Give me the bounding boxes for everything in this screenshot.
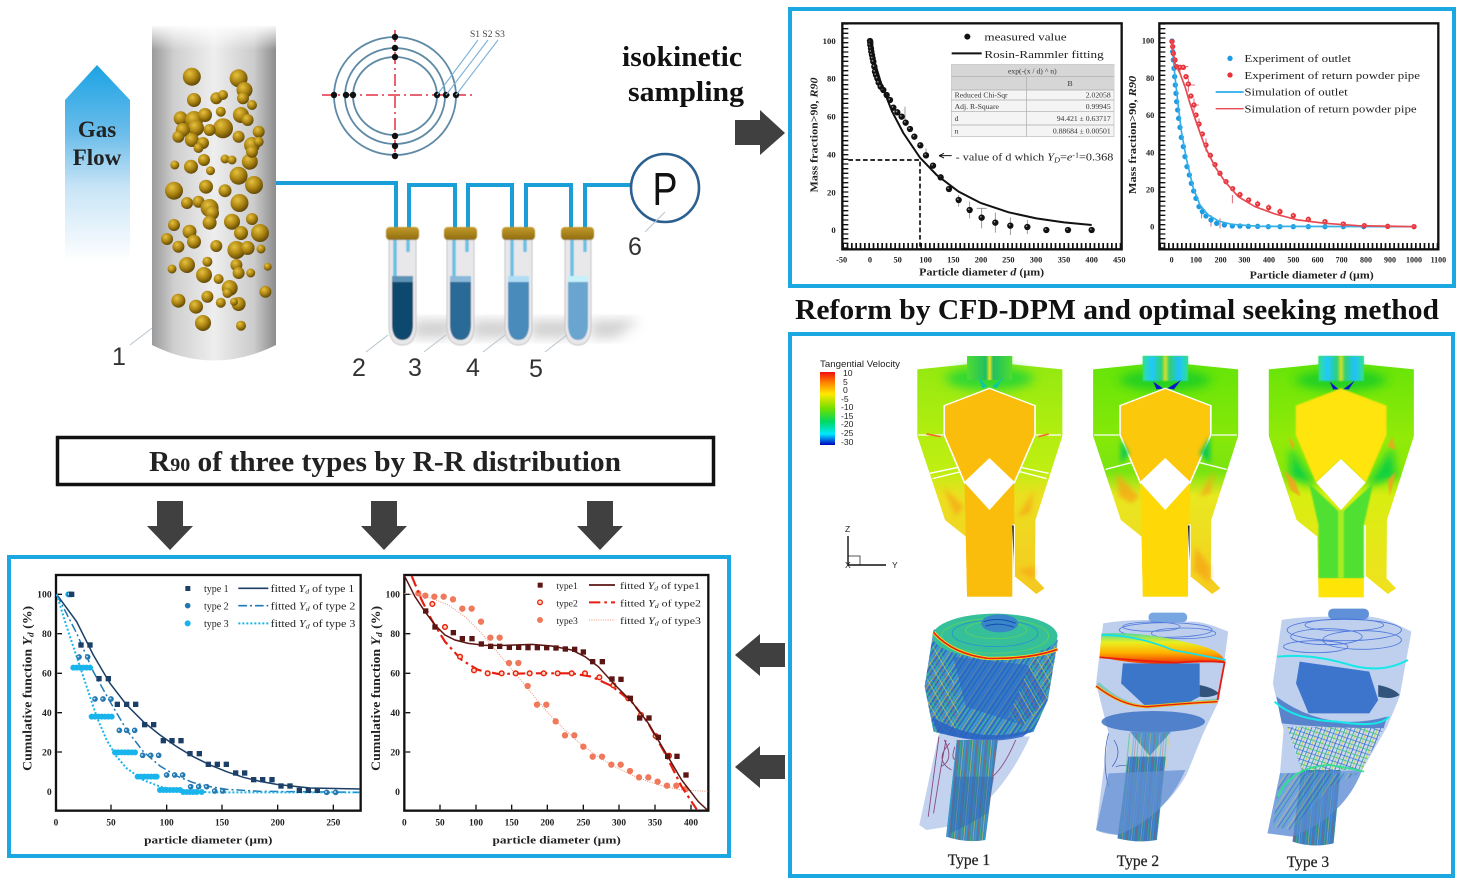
axis labels: 500 — [1287, 256, 1299, 265]
heading: isokinetic sampling: isokinetic — [622, 41, 742, 73]
axis labels: 450 — [1113, 256, 1126, 265]
arrow: down middle — [361, 501, 407, 550]
fit statistics table: 0.88684 ± 0.00501 — [1053, 127, 1111, 136]
tangential velocity colour legend: -30 — [841, 437, 854, 447]
axis labels: 400 — [684, 819, 698, 829]
fit statistics table: Adj. R-Square — [955, 102, 999, 111]
axis labels: 400 — [1263, 256, 1275, 265]
tangential velocity colour legend: Tangential Velocity — [820, 359, 900, 370]
axis labels: (%) — [21, 606, 35, 632]
chart legend: Simulation of outlet — [1244, 87, 1348, 99]
axis triad: Y — [892, 560, 898, 570]
tangential velocity colour legend: -5 — [841, 394, 849, 404]
axis labels: -50 — [836, 256, 847, 265]
axis labels: 200 — [1215, 256, 1227, 265]
chart legend: d — [655, 621, 660, 628]
axis labels: d — [27, 631, 36, 637]
chart legend: type3 — [556, 616, 578, 627]
axis labels: 100 — [37, 590, 52, 601]
axis labels: 100 — [1190, 256, 1202, 265]
chart legend: of type1 — [658, 581, 700, 592]
chart legend: fitted Y — [271, 619, 305, 630]
fit statistics table: d — [955, 114, 959, 123]
contour: type 2 — [1093, 356, 1238, 597]
chart legend: fitted Y — [620, 616, 653, 627]
chart legend: type 2 — [204, 601, 229, 612]
heading: isokinetic sampling — [622, 41, 744, 108]
fit statistics table: Reduced Chi-Sqr — [955, 90, 1008, 99]
chart legend — [537, 581, 701, 628]
axis labels: 50 — [435, 819, 445, 829]
type labels — [948, 852, 1329, 871]
axis labels: 60 — [390, 669, 400, 680]
axis labels: 100 — [1142, 37, 1154, 46]
annotation: value of d: e — [1067, 152, 1072, 164]
axis labels: 1100 — [1431, 256, 1446, 265]
axis labels: 900 — [1384, 256, 1396, 265]
axis labels: 100 — [469, 819, 483, 829]
arrow: gas flow: Gas — [78, 117, 116, 142]
title box: R90 of three types: R90 of three types by R-R distribution — [149, 447, 621, 478]
chart legend: d — [306, 606, 310, 613]
component number labels: 6 — [628, 233, 642, 261]
fit statistics table: 2.02058 — [1086, 90, 1111, 99]
axis labels: Particle diameter d (µm) — [1250, 271, 1374, 282]
axis labels: 50 — [894, 256, 902, 265]
axis labels: 0 — [831, 225, 836, 235]
axis labels: 60 — [827, 112, 836, 122]
fit statistics table: 0.99945 — [1086, 102, 1111, 111]
arrow: gas flow — [65, 65, 130, 262]
axis labels: 0 — [47, 787, 52, 798]
chart legend: of type 1 — [309, 584, 354, 595]
axis labels: 800 — [1360, 256, 1372, 265]
axis labels: 0 — [395, 787, 400, 798]
axis labels: 80 — [1146, 74, 1154, 83]
chart legend — [185, 584, 355, 631]
axis labels: 0 — [1170, 256, 1174, 265]
axis labels: (%) — [369, 606, 383, 632]
axis labels: 1000 — [1406, 256, 1422, 265]
axis labels: Mass fraction>90, R90 — [1128, 76, 1139, 194]
axis labels: d — [375, 631, 384, 637]
column with particles — [150, 24, 278, 360]
axis labels: 40 — [1146, 148, 1154, 157]
component number labels: 5 — [529, 355, 543, 383]
axis labels: 0 — [54, 819, 59, 829]
type labels: Type 2 — [1117, 853, 1159, 870]
heading: isokinetic sampling: sampling — [628, 76, 744, 108]
chart legend: of type2 — [659, 598, 701, 609]
chart legend: Rosin-Rammler fitting — [984, 49, 1104, 61]
tangential velocity colour legend: -15 — [841, 411, 854, 421]
axis labels — [369, 590, 698, 846]
chart legend: type1 — [556, 581, 578, 592]
axis labels: 200 — [975, 256, 987, 265]
tangential velocity colour legend: -25 — [841, 428, 854, 438]
axis labels: 60 — [1146, 111, 1154, 120]
axis labels: 350 — [648, 819, 662, 829]
axis labels: 100 — [386, 590, 400, 601]
sampling point rings: S1 S2 S3 — [470, 30, 505, 40]
heading: reform method: Reform by CFD-DPM and optimal seeking method — [795, 295, 1439, 326]
annotation: value of d: = — [1060, 152, 1067, 164]
fit statistics table — [951, 64, 1114, 137]
sampling apparatus schematic — [65, 24, 699, 383]
axis labels: 300 — [1030, 256, 1042, 265]
chart legend: of type 3 — [310, 619, 355, 630]
axis labels: 0 — [402, 819, 407, 829]
component number labels: 1 — [112, 343, 126, 371]
axis labels: 20 — [390, 747, 400, 758]
axis labels: 50 — [106, 819, 116, 829]
arrow: from simulation to charts lower — [735, 746, 785, 788]
component number labels: 4 — [466, 354, 480, 382]
axis labels: 300 — [1238, 256, 1250, 265]
test tube 2 — [386, 227, 419, 345]
chart legend: fitted Y — [620, 581, 653, 592]
axis labels: 300 — [612, 819, 626, 829]
arrow: from simulation to charts upper — [735, 634, 785, 676]
axis labels: 250 — [1002, 256, 1015, 265]
axis labels: 100 — [160, 819, 174, 829]
test tube 5 — [561, 227, 594, 345]
axis labels: 100 — [919, 256, 932, 265]
axis labels: 0 — [1150, 223, 1154, 232]
chart: return pipe cumulative function — [369, 575, 708, 846]
axis labels: 200 — [540, 819, 555, 829]
chart legend — [1216, 53, 1420, 115]
axis labels — [809, 36, 1126, 278]
chart legend: Simulation of return powder pipe — [1244, 103, 1417, 115]
chart legend: of type3 — [659, 616, 701, 627]
axis labels: 350 — [1058, 256, 1070, 265]
tangential velocity colour legend — [820, 359, 900, 447]
component number labels — [112, 212, 665, 383]
axis triad: X — [845, 560, 851, 570]
axis labels: 150 — [947, 256, 960, 265]
pump gauge P — [631, 154, 699, 222]
component number labels: 2 — [352, 354, 366, 382]
fit statistics table: n — [955, 127, 959, 136]
contour: type 3 — [1269, 356, 1414, 597]
streamlines: type 3 — [1267, 609, 1411, 845]
axis triad — [845, 524, 898, 570]
tangential velocity colour legend: -20 — [841, 419, 854, 429]
chart legend: d — [306, 624, 310, 631]
axis labels: 100 — [823, 36, 836, 46]
arrow: down left — [147, 501, 193, 550]
axis labels: particle diameter (µm) — [144, 834, 273, 846]
axis labels: 40 — [827, 149, 836, 159]
type labels: Type 3 — [1287, 854, 1329, 871]
axis labels: 400 — [1085, 256, 1098, 265]
axis labels: 20 — [42, 747, 52, 758]
panel: measured particle size distributions — [790, 9, 1454, 286]
chart legend — [952, 32, 1104, 61]
axis labels: 40 — [390, 708, 400, 719]
contour: type 1 — [917, 356, 1062, 597]
chart legend: Experiment of outlet — [1244, 53, 1351, 65]
chart legend: d — [654, 586, 659, 593]
connecting pipes — [276, 183, 631, 232]
axis labels — [21, 590, 341, 846]
axis labels: 150 — [215, 819, 229, 829]
chart legend: Experiment of return powder pipe — [1244, 70, 1420, 82]
axis labels: 250 — [576, 819, 591, 829]
chart: Rosin-Rammler fitting — [809, 23, 1126, 278]
axis labels: 0 — [868, 256, 872, 265]
type labels: Type 1 — [948, 852, 990, 869]
tangential velocity colour legend: -10 — [841, 402, 854, 412]
arrow: gas flow: Flow — [73, 145, 122, 170]
streamlines: type 1 — [919, 614, 1058, 841]
axis labels: Cumulative function Y — [21, 638, 35, 771]
axis labels: 20 — [827, 187, 836, 197]
axis labels: 80 — [827, 74, 836, 84]
annotation: value of d: -1 — [1072, 150, 1079, 159]
fit statistics table: 94.421 ± 0.63717 — [1057, 114, 1111, 123]
axis labels: 80 — [42, 629, 52, 640]
axis labels: 60 — [42, 669, 52, 680]
axis labels: particle diameter (µm) — [492, 834, 621, 846]
axis labels: 600 — [1312, 256, 1324, 265]
tangential velocity colour legend: 10 — [843, 368, 853, 378]
fit statistics table: B — [1067, 79, 1073, 88]
chart legend: type 3 — [204, 619, 229, 630]
streamlines: type 2 — [1096, 613, 1228, 841]
chart legend: type2 — [556, 598, 578, 609]
axis labels: 700 — [1336, 256, 1348, 265]
chart legend: fitted Y — [271, 601, 305, 612]
axis labels: Particle diameter d (µm) — [919, 267, 1044, 278]
arrow: to particle size charts — [735, 110, 785, 155]
tangential velocity colour legend: 0 — [843, 385, 848, 395]
annotation: value of d: =0.368 — [1079, 152, 1114, 164]
arrow: down right — [577, 501, 623, 550]
sampling point rings — [322, 30, 505, 162]
axis triad: Z — [845, 524, 850, 534]
panel: cumulative function charts — [9, 557, 729, 856]
chart legend: fitted Y — [620, 598, 653, 609]
test tubes — [386, 227, 640, 345]
axis labels: 200 — [271, 819, 285, 829]
axis labels: 20 — [1146, 185, 1154, 194]
axis labels: 150 — [505, 819, 519, 829]
pump gauge P: P — [652, 163, 678, 215]
fit statistics table: exp(-(x / d) ^ n) — [1008, 66, 1057, 75]
axis labels: Cumulative function Y — [369, 638, 383, 771]
chart: outlet and return pipe comparison — [1128, 23, 1446, 282]
chart legend: fitted Y — [271, 584, 304, 595]
axis labels: 40 — [42, 708, 52, 719]
component number labels: 3 — [408, 354, 422, 382]
chart legend: of type 2 — [310, 601, 355, 612]
test tube 3 — [444, 227, 477, 345]
chart: outlet cumulative function — [21, 575, 361, 846]
panel: CFD-DPM simulation results — [790, 334, 1453, 876]
chart legend: type 1 — [204, 584, 229, 595]
title box: R90 of three types — [58, 438, 714, 484]
annotation: value of d — [939, 150, 1114, 165]
axis labels: 250 — [326, 819, 341, 829]
test tube 4 — [502, 227, 535, 345]
axis labels: 80 — [390, 629, 400, 640]
chart legend: d — [305, 589, 310, 596]
axis labels — [1128, 37, 1446, 282]
annotation: value of d: D — [1053, 156, 1061, 165]
tangential velocity colour legend: 5 — [843, 377, 848, 387]
chart legend: d — [655, 603, 660, 610]
chart legend: measured value — [984, 32, 1067, 44]
axis labels: Mass fraction>90, R90 — [809, 77, 820, 192]
annotation: value of d: - value of d which Y — [956, 152, 1053, 164]
